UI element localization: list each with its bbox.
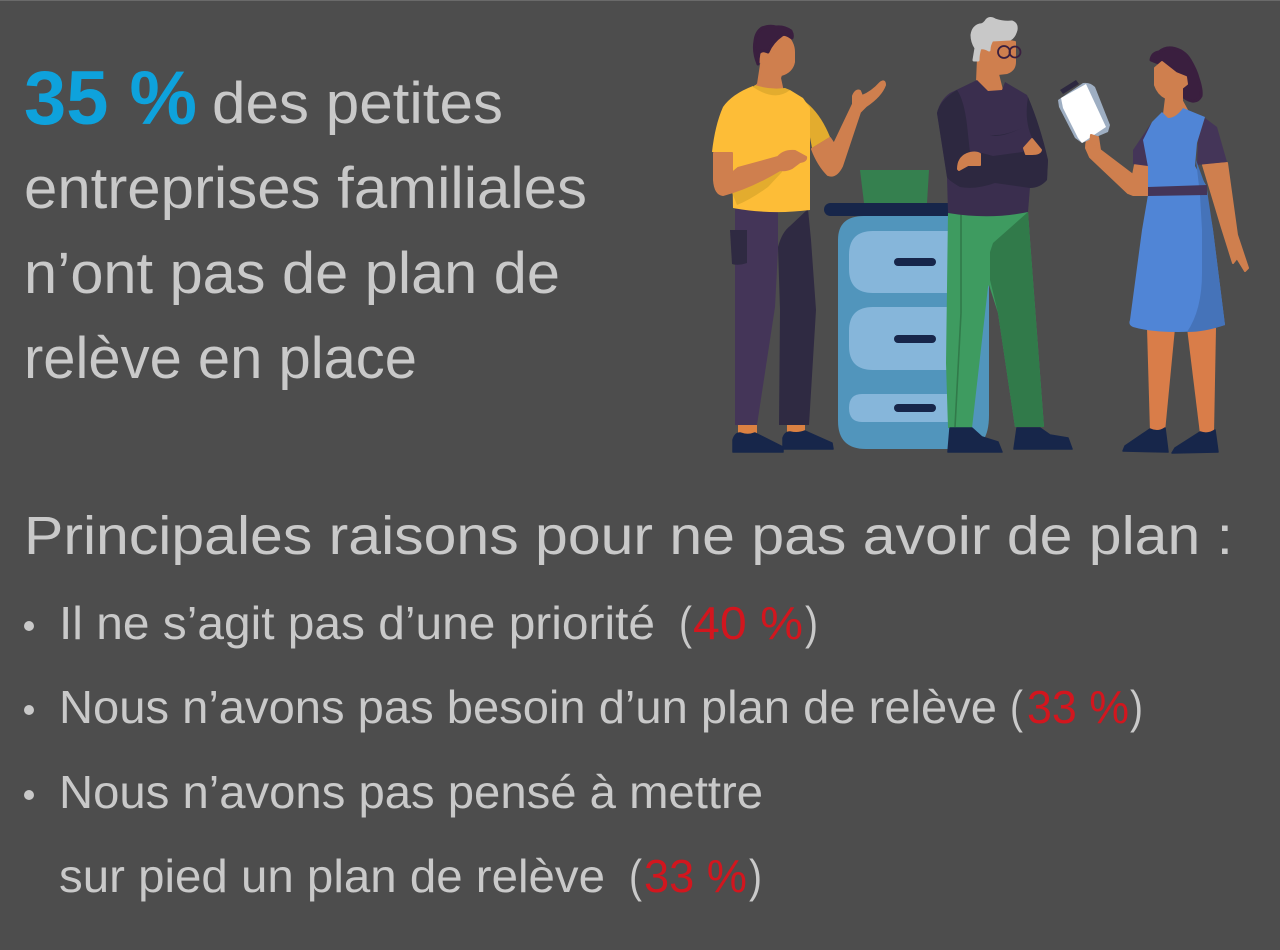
heading text: des petites: [212, 71, 503, 136]
reason 3: Nous n’avons pas pensé à mettre: [59, 766, 763, 818]
person: woman in blue dress: [1086, 48, 1248, 453]
illustration: three people around a filing cabinet: [712, 18, 1248, 453]
reason 3: 33 %: [644, 850, 747, 902]
reason 2: (: [1010, 681, 1024, 733]
reason 1: 40 %: [693, 597, 803, 649]
reason 2: Nous n’avons pas besoin d’un plan de relève: [59, 681, 997, 733]
heading: 35 % statistic: [24, 56, 587, 391]
reason 3: [24, 766, 763, 902]
icon: clipboard: [1058, 80, 1110, 147]
key figure: 35 %: [24, 56, 197, 141]
heading text: relève en place: [24, 326, 417, 391]
heading text: n’ont pas de plan de: [24, 241, 560, 306]
subheading: main reasons: Principales raisons pour ne pas avoir de plan :: [24, 506, 1233, 566]
reason 1: Il ne s’agit pas d’une priorité: [59, 597, 655, 649]
heading text: [24, 71, 587, 391]
icon: filing cabinet with plant pot: [824, 170, 989, 449]
person: older man with glasses: [937, 18, 1072, 452]
person: man in yellow shirt: [712, 26, 885, 452]
reason 2: 33 %: [1027, 681, 1129, 733]
reason 3: ): [749, 850, 762, 902]
reason 3: sur pied un plan de relève: [59, 850, 605, 902]
reason 1: ): [805, 597, 818, 649]
heading text: entreprises familiales: [24, 156, 587, 221]
reason 3: (: [629, 850, 643, 902]
reason 2: ): [1130, 681, 1143, 733]
reason 1: (: [679, 597, 693, 649]
list of reasons: [24, 597, 1143, 902]
